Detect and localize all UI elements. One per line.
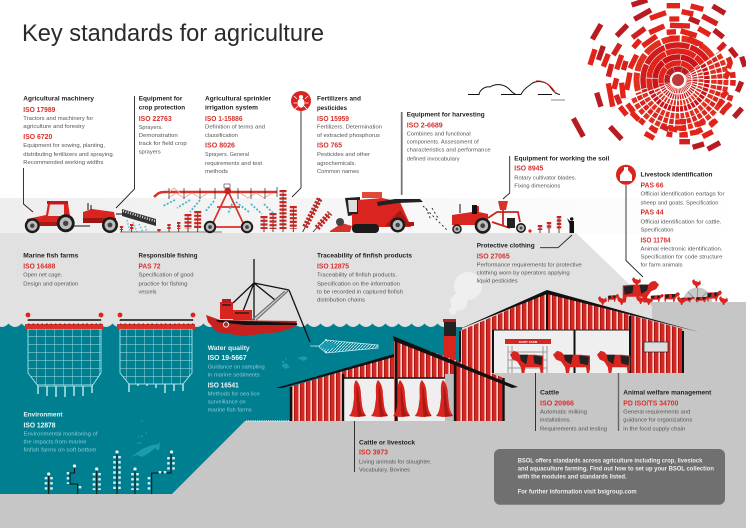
text: responsible fishing: Specification of good [138, 273, 194, 279]
text: environment: ISO 12878 [24, 420, 56, 429]
text: environment: finfish farms on soft bottom [24, 448, 97, 454]
text: traceability of finfish products [317, 253, 412, 304]
sunburst graphic [573, 0, 745, 149]
text: traceability of finfish products: Specification on the information [317, 282, 400, 288]
text: marine fish farms: ISO 16488 [23, 262, 55, 271]
text: responsible fishing [138, 253, 198, 296]
text: cattle or livestock: ISO 3973 [359, 448, 388, 457]
text: water quality: marine fish farms [208, 408, 252, 414]
text: agricultural sprinkler irrigation system: requirements and test [205, 161, 262, 167]
text: fertilizers and pesticides: agrochemicals. [317, 161, 356, 167]
text: agricultural sprinkler irrigation system: methods [205, 169, 228, 175]
text: traceability of finfish products: Traceability of finfish products [317, 253, 412, 260]
text: livestock identification: Specification [640, 228, 674, 234]
plants row [120, 190, 559, 233]
fish cage 2 [117, 313, 195, 393]
icon: person in protective clothing [567, 217, 574, 233]
text: equipment for harvesting: Equipment for harvesting [407, 112, 485, 119]
text: livestock identification: ISO 11784 [640, 236, 671, 245]
text: animal welfare management: in the food supply chain [623, 427, 685, 433]
leader lines [24, 96, 643, 472]
text: agricultural sprinkler irrigation system: ISO 1-15886 [205, 114, 242, 123]
text: agricultural machinery: Tractors and machinery for [23, 116, 93, 122]
text: marine fish farms: Marine fish farms [23, 253, 79, 260]
text: animal welfare management: Animal welfare management [623, 389, 712, 396]
text: cattle or livestock: Living animals for slaughter. [359, 459, 432, 465]
text: traceability of finfish products: distribution chains [317, 298, 365, 304]
text: agricultural machinery: Equipment for sowing, planting, [23, 143, 105, 149]
trawl net [310, 339, 378, 353]
text: cattle or livestock [359, 439, 432, 474]
callout: BSOL information box: and aquaculture farming. Find out how to set up your BSOL collection [518, 467, 714, 473]
milking machine and cows: DAIRY FARM [519, 340, 538, 344]
text: responsible fishing: practice for fishing [138, 282, 188, 288]
text: fertilizers and pesticides: of extracted phosphorus [317, 133, 380, 139]
text: equipment for working the soil: Equipment for working the soil [514, 156, 609, 163]
clouds [468, 81, 565, 100]
text: livestock identification: PAS 44 [640, 208, 664, 217]
text: environment [24, 412, 98, 454]
icon: small fish [281, 356, 308, 369]
text: agricultural sprinkler irrigation system: Sprayers. General [205, 152, 249, 158]
sprinkler irrigation system [154, 184, 277, 233]
text: equipment for crop protection [139, 96, 187, 156]
text: water quality [208, 345, 265, 414]
text: agricultural sprinkler irrigation system [205, 96, 271, 175]
text: water quality: surveillance on [208, 400, 246, 406]
text: fertilizers and pesticides [317, 96, 382, 175]
text: responsible fishing: Responsible fishing [138, 253, 198, 260]
icon: insect [291, 91, 311, 111]
text: agricultural machinery: ISO 6720 [23, 132, 52, 141]
tractor with sprayer [25, 201, 156, 233]
text: protective clothing [477, 242, 582, 285]
text: animal welfare management: guidance for organizations [623, 418, 692, 424]
front barn: slaughter shed [276, 336, 518, 421]
text: animal welfare management: General requirements and [623, 410, 690, 416]
text: fertilizers and pesticides: Fertilizers. Determination [317, 125, 382, 131]
icon: shark and bubbles [131, 420, 160, 457]
chimney [443, 319, 456, 360]
text: equipment for working the soil: ISO 8945 [514, 164, 544, 173]
text: environment: the impacts from marine [24, 440, 86, 446]
text: marine fish farms: Design and operation [23, 282, 78, 288]
text: protective clothing: Protective clothing [477, 242, 535, 249]
text: cattle: installations. [540, 418, 571, 424]
text: equipment for harvesting: ISO 2-6689 [407, 121, 443, 130]
text: environment: Environmental monitoring of [24, 432, 98, 438]
text: marine fish farms [23, 253, 79, 288]
text: environment: Environment [24, 412, 63, 419]
text: equipment for crop protection: ISO 22763 [139, 114, 172, 123]
text: equipment for harvesting: characteristics and performance [407, 148, 491, 154]
text: agricultural sprinkler irrigation system: irrigation system [205, 105, 258, 112]
callout: BSOL information box [494, 449, 725, 505]
text: equipment for crop protection: track for field crop [139, 141, 187, 147]
callout: BSOL information box: BSOL offers standards across agriculture including crop, livestock [518, 459, 703, 465]
text: livestock identification: Animal electronic identification. [640, 247, 723, 253]
text: agricultural machinery: Recommended working widths [23, 160, 103, 166]
callout: BSOL information box: For further information visit bsigroup.com [518, 490, 637, 496]
text: equipment for harvesting: defined invocabulary [407, 157, 460, 163]
text: water quality: Guidance on sampling [208, 365, 265, 371]
text: equipment for crop protection: Sprayers. [139, 125, 163, 131]
text: agricultural machinery: agriculture and forestry [23, 124, 85, 130]
text: equipment for working the soil: Fixing dimensions [514, 184, 560, 190]
text: cattle: ISO 20966 [540, 399, 574, 408]
text: cattle: Automatic milking [540, 410, 587, 416]
text: livestock identification: Official identification eartags for [640, 192, 725, 198]
text: agricultural sprinkler irrigation system: ISO 8026 [205, 141, 235, 150]
text: equipment for working the soil: Rotary cultivator blades. [514, 176, 577, 182]
text: protective clothing: liquid pesticides [477, 279, 518, 285]
seaweed [46, 450, 174, 494]
text: water quality: ISO 16541 [208, 381, 239, 390]
fishing boat [206, 259, 310, 342]
text: fertilizers and pesticides: Pesticides and other [317, 152, 370, 158]
text: traceability of finfish products: to be recorded in captured finfish [317, 290, 403, 296]
text: cattle: Cattle [540, 389, 559, 396]
text: water quality: in marine sediments [208, 373, 260, 379]
text: agricultural machinery: ISO 17989 [23, 105, 55, 114]
combine harvester [330, 192, 447, 233]
text: water quality: Methods for sea lice [208, 392, 260, 398]
text: water quality: ISO 19-5667 [208, 353, 247, 362]
title: Key standards for agriculture [22, 20, 324, 47]
tractor with cultivator [452, 201, 526, 234]
text: agricultural sprinkler irrigation system: Definition of terms and [205, 125, 265, 131]
text: livestock identification: PAS 66 [640, 181, 664, 190]
text: agricultural sprinkler irrigation system: classification [205, 133, 238, 139]
text: equipment for working the soil [514, 156, 609, 190]
text: equipment for crop protection: sprayers [139, 150, 161, 156]
milking machine and cows [505, 339, 630, 373]
text: equipment for harvesting: Combines and functional [407, 132, 471, 138]
text: fertilizers and pesticides: ISO 15959 [317, 114, 349, 123]
text: equipment for harvesting: components. Assessment of [407, 140, 479, 146]
text: cattle or livestock: Vocabulary. Bovines [359, 468, 410, 474]
text: cattle [540, 389, 607, 433]
text: animal welfare management [623, 389, 712, 433]
text: water quality: Water quality [208, 345, 250, 352]
text: livestock identification: Official identification for cattle. [640, 219, 722, 225]
text: agricultural machinery [23, 96, 115, 166]
callout: BSOL information box: with the modules and standards listed. [517, 475, 627, 481]
smoke [449, 272, 482, 315]
fish cage 1 [25, 313, 103, 397]
text: fertilizers and pesticides: pesticides [317, 105, 347, 112]
text: fertilizers and pesticides: ISO 765 [317, 141, 343, 150]
text: cattle: Requirements and testing [540, 427, 607, 433]
text: equipment for crop protection: Demonstration [139, 133, 178, 139]
text: fertilizers and pesticides: Common names [317, 169, 359, 175]
text: livestock identification: sheep and goats. Specification [640, 201, 718, 207]
text: marine fish farms: Open net cage. [23, 273, 63, 279]
text: agricultural sprinkler irrigation system: Agricultural sprinkler [205, 96, 271, 103]
text: equipment for crop protection: crop protection [139, 105, 185, 112]
livestock group [598, 277, 728, 305]
text: livestock identification: Specification for code structure [640, 255, 722, 261]
text: protective clothing: ISO 27065 [477, 251, 510, 260]
text: traceability of finfish products: Traceability of finfish products. [317, 273, 397, 279]
text: responsible fishing: vessels [138, 290, 157, 296]
text: agricultural machinery: distributing fertilizers and spraying. [23, 152, 115, 158]
text: equipment for harvesting [407, 112, 491, 163]
text: cattle or livestock: Cattle or livestock [359, 439, 415, 446]
rear barn: cattle shed [455, 290, 699, 373]
text: livestock identification [640, 172, 725, 269]
text: agricultural machinery: Agricultural machinery [23, 96, 94, 103]
text: protective clothing: Performance requirements for protective [477, 263, 582, 269]
text: traceability of finfish products: ISO 12875 [317, 262, 350, 271]
text: fertilizers and pesticides: Fertilizers and [317, 96, 361, 103]
text: livestock identification: Livestock identification [640, 172, 712, 179]
sea [0, 323, 462, 494]
icon: ear tag [616, 165, 636, 185]
text: responsible fishing: PAS 72 [138, 262, 160, 271]
text: equipment for crop protection: Equipment for [139, 96, 183, 103]
text: animal welfare management: PD ISO/TS 34700 [623, 399, 678, 408]
text: livestock identification: for farm animals [640, 263, 683, 269]
text: protective clothing: clothing worn by operators applying [477, 271, 570, 277]
